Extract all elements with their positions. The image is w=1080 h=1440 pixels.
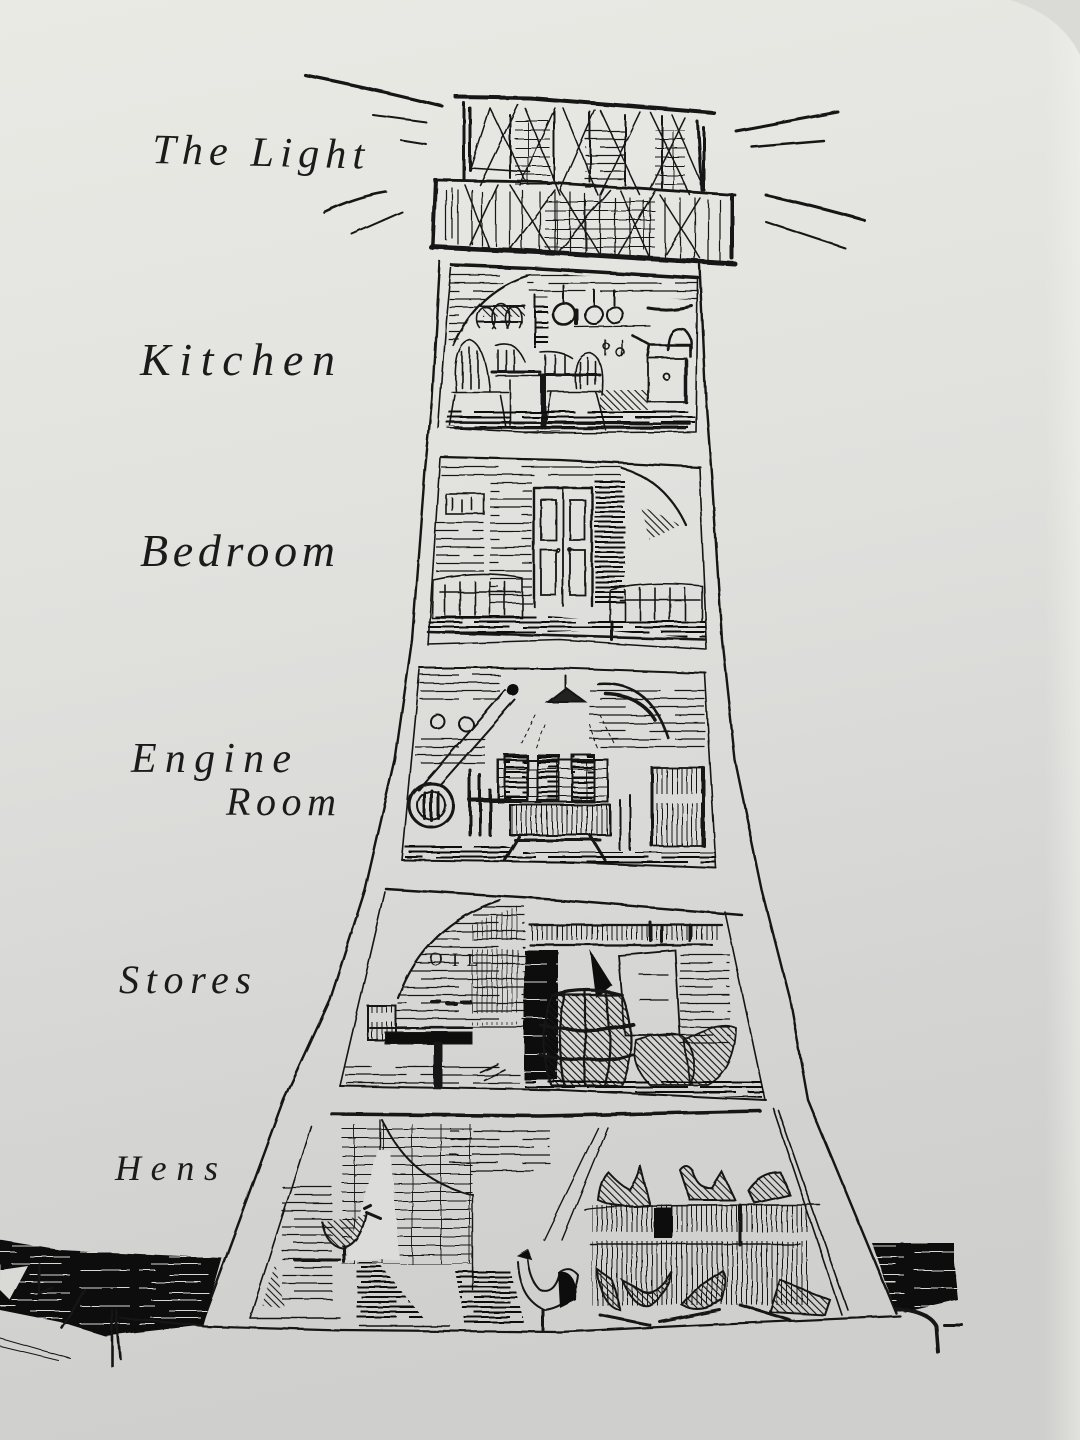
icon: cabinet	[620, 768, 704, 850]
light rays	[305, 75, 864, 248]
kitchen floor	[445, 408, 695, 432]
icon: gauges	[431, 715, 473, 731]
label: Stores: Stores	[119, 957, 251, 1002]
icon: sacks and baskets	[618, 950, 736, 1085]
right wall hatching	[680, 950, 730, 1050]
sea and ground: right	[872, 1243, 962, 1352]
icon: left bed	[432, 574, 522, 618]
icon: chairs and table	[450, 340, 606, 430]
room: hens	[250, 1108, 848, 1330]
icon: oil tank: OIL	[430, 950, 478, 971]
icon: hens on coop	[598, 1165, 790, 1207]
label: The Light: The Light	[152, 127, 366, 179]
icon: dresser with plates	[477, 295, 548, 349]
icon: ground hens	[598, 1270, 830, 1325]
label: Engine: Engine	[130, 736, 291, 782]
label: Room: Room	[225, 779, 336, 824]
tower outer walls	[204, 262, 896, 1317]
room: bedroom	[428, 457, 707, 650]
icon: engine	[470, 755, 610, 860]
icon: right bed	[610, 584, 702, 640]
icon: oil tank	[395, 900, 525, 1030]
icon: stove and kettle	[603, 306, 692, 402]
icon: bench	[368, 1006, 472, 1086]
icon: flywheel and belt	[409, 684, 519, 827]
gallery railing	[431, 180, 735, 264]
icon: barrel	[540, 990, 634, 1086]
icon: small rooster	[295, 1205, 380, 1262]
lantern room	[456, 97, 714, 195]
sea and ground: left	[0, 1240, 900, 1366]
icon: framed picture	[446, 494, 484, 514]
label: Bedroom: Bedroom	[140, 525, 335, 576]
icon: curved pipe	[598, 684, 668, 738]
room: engine room	[402, 668, 716, 868]
icon: pans	[553, 285, 650, 327]
room: stores	[340, 889, 766, 1100]
dark doorway hatching	[524, 950, 558, 1080]
dark stores floor	[525, 1078, 766, 1098]
bedroom floor	[428, 615, 707, 640]
icon: hanging lamp	[520, 675, 615, 750]
engine room floor	[405, 845, 716, 866]
label: Hens: Hens	[114, 1148, 218, 1188]
slanted post	[544, 1128, 608, 1240]
paper on floor	[480, 1064, 505, 1080]
icon: coop	[585, 1205, 820, 1305]
label: Kitchen: Kitchen	[139, 334, 335, 385]
room: kitchen	[438, 265, 698, 433]
shelves	[530, 922, 722, 945]
icon: double door	[534, 488, 592, 606]
hanging bundle	[590, 950, 612, 998]
stores floor hatching	[345, 1064, 520, 1084]
icon: large rooster	[518, 1250, 578, 1330]
